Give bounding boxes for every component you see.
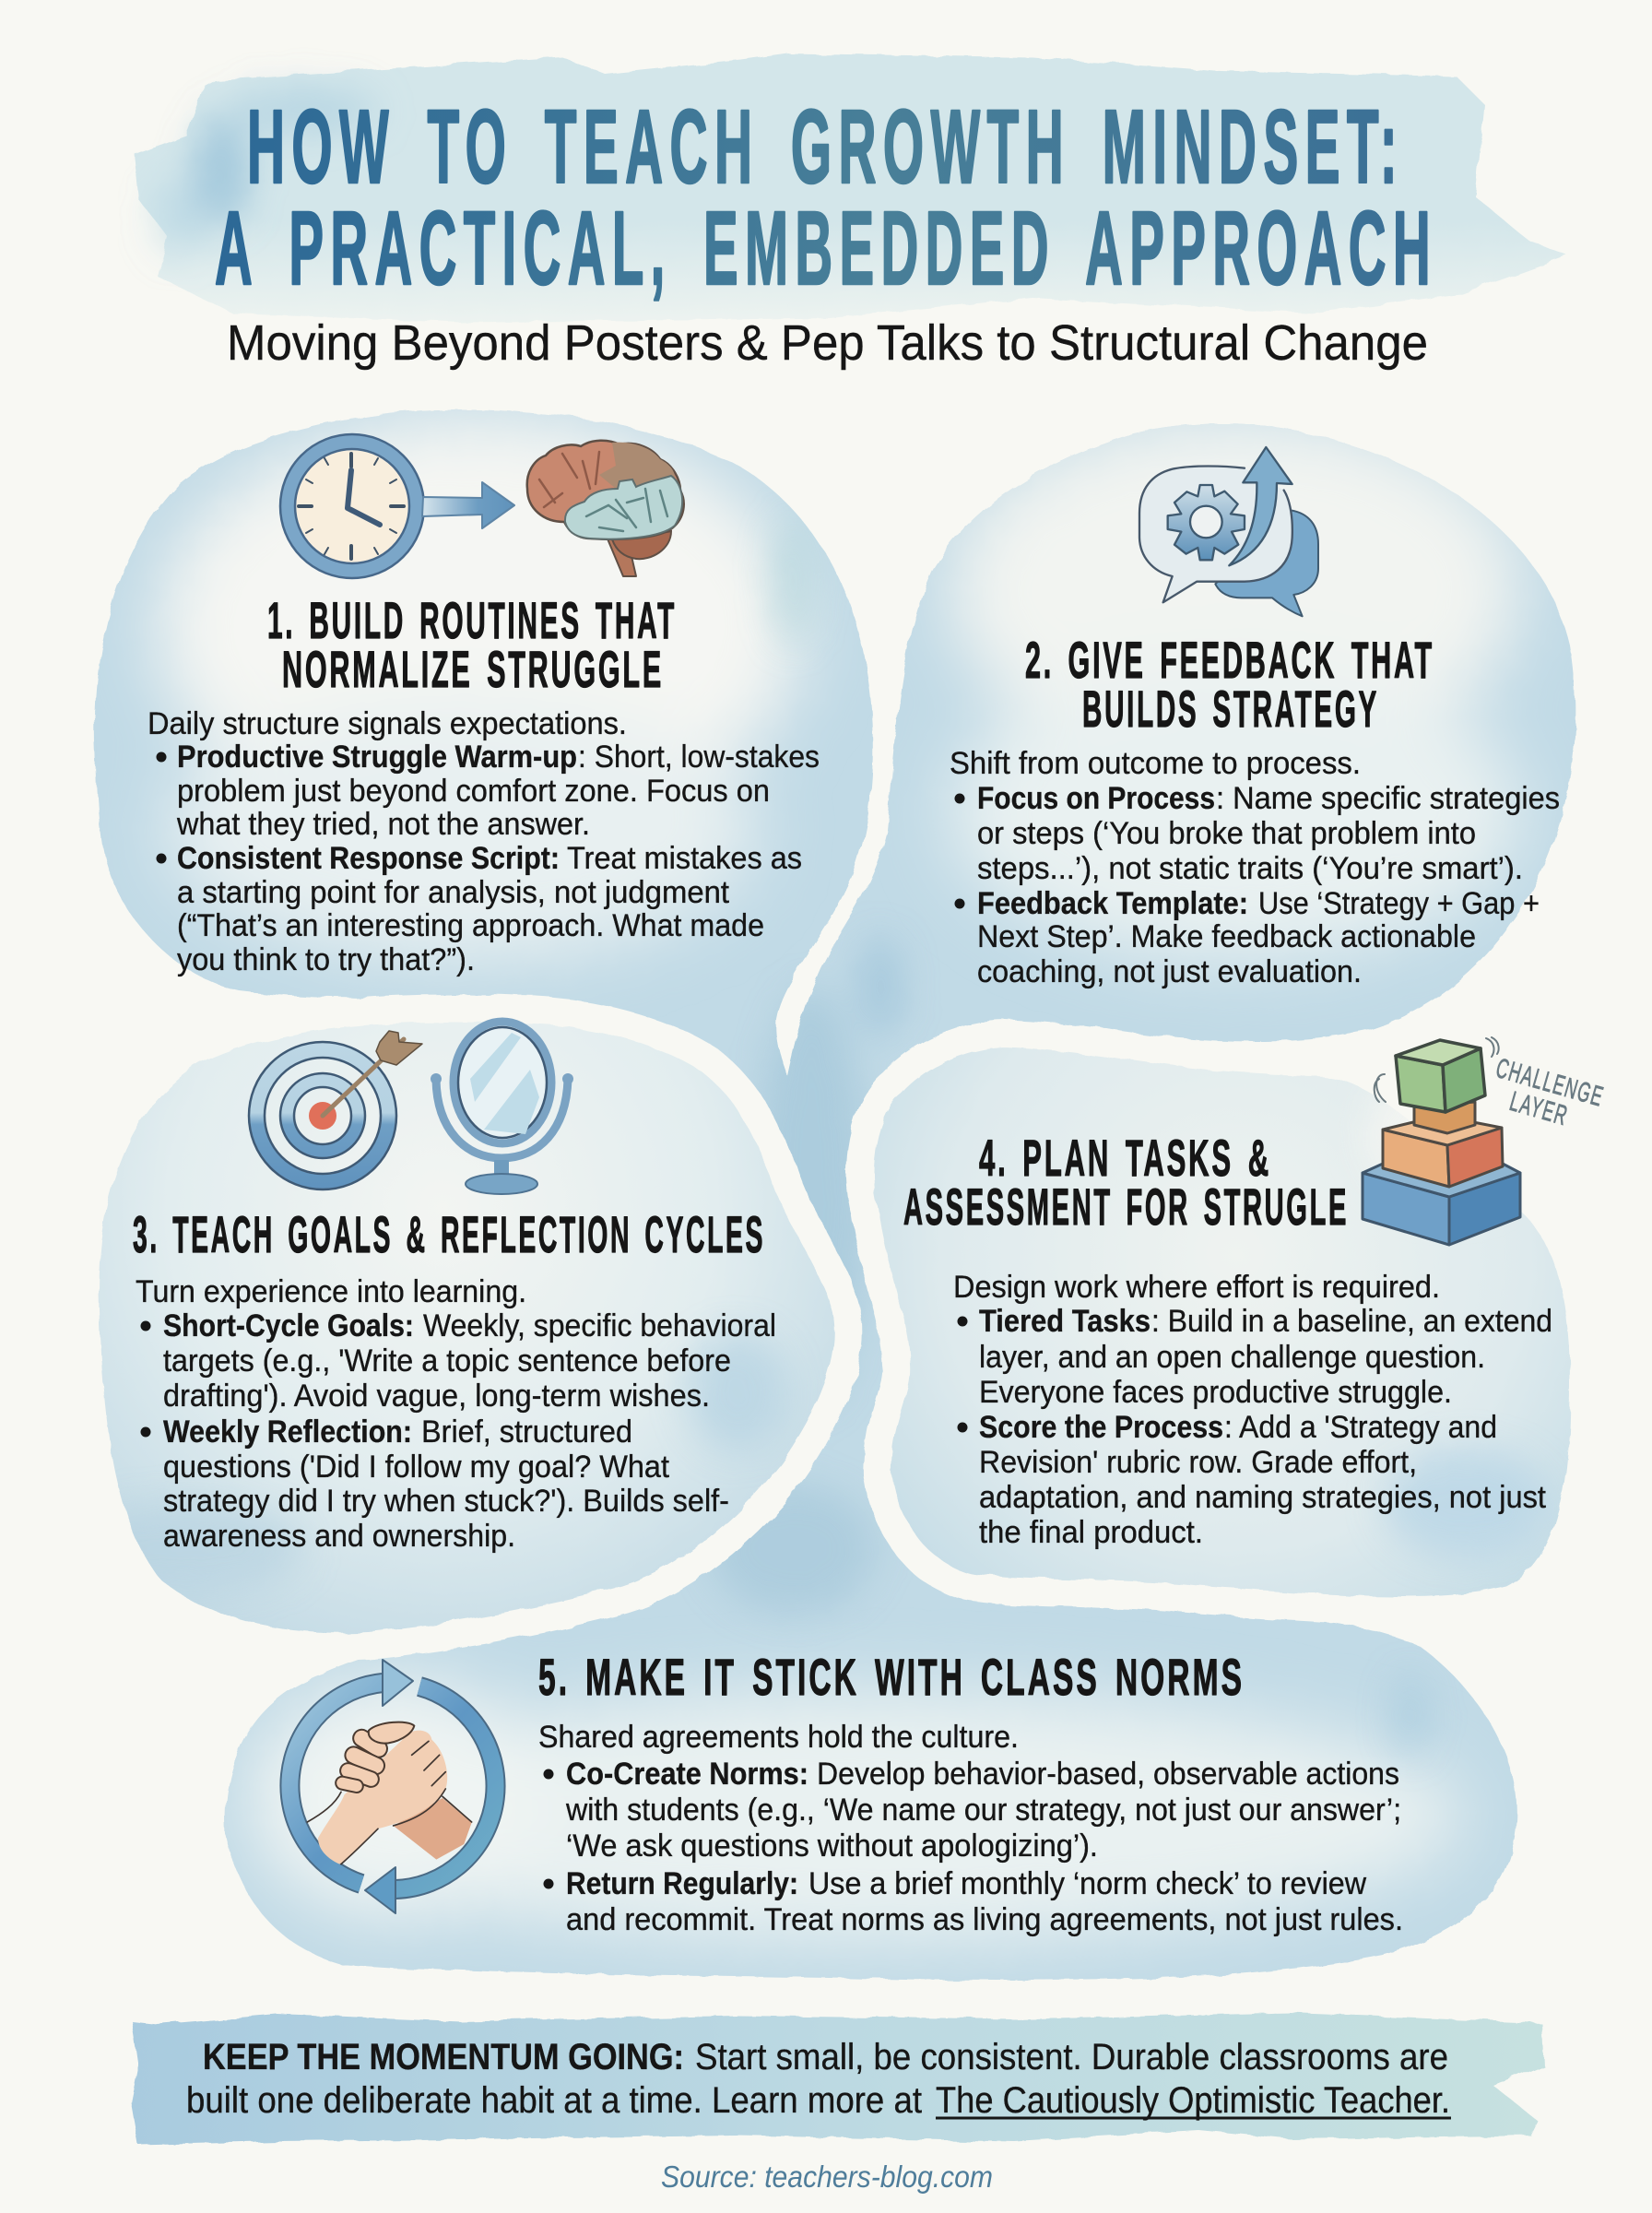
icon: brain puzzle — [527, 441, 684, 576]
body text 1: what they tried, not the answer. — [176, 807, 590, 842]
body text 3: strategy did I try when stuck?'). Builds self- — [163, 1484, 729, 1519]
body text 1: Productive Struggle Warm-up — [177, 740, 577, 775]
body text 2: : Name specific strategies — [1216, 781, 1560, 816]
subtitle: Moving Beyond Posters & Pep Talks to Structural Change — [227, 315, 1428, 371]
watercolor tree wash background — [74, 396, 1604, 2001]
body text 3: awareness and ownership. — [163, 1519, 515, 1554]
icon: clock — [280, 434, 424, 578]
body text 2 — [950, 746, 1560, 989]
body text 5 — [538, 1720, 1403, 1937]
label: challenge layer — [1493, 1053, 1608, 1131]
body text 1: you think to try that?”). — [177, 942, 475, 977]
body text 4: the final product. — [979, 1515, 1203, 1550]
footer text: KEEP THE MOMENTUM GOING: — [203, 2037, 684, 2077]
body text 3 — [136, 1274, 776, 1554]
title wash — [135, 53, 1567, 323]
icon: handshake with cycle arrows — [289, 1660, 496, 1913]
body text 4: : Build in a baseline, an extend — [1151, 1304, 1552, 1339]
icon: target and arrow — [249, 1031, 422, 1189]
body text 2: Use ‘Strategy + Gap + — [1258, 886, 1540, 921]
footer wash — [131, 2013, 1543, 2145]
body text 1: Consistent Response Script: — [177, 841, 560, 876]
body text 4: Tiered Tasks — [979, 1304, 1150, 1339]
body text 5: Shared agreements hold the culture. — [538, 1720, 1019, 1755]
footer text: The Cautiously Optimistic Teacher. — [936, 2080, 1450, 2121]
footer banner — [131, 2013, 1543, 2145]
body text 2: Feedback Template: — [977, 886, 1248, 921]
body text 1: problem just beyond comfort zone. Focus on — [177, 774, 770, 809]
body text 4: Design work where effort is required. — [953, 1270, 1440, 1305]
icon: speech bubbles gear arrow — [1139, 447, 1318, 616]
heading 2: BUILDS STRATEGY — [1082, 680, 1379, 738]
body text 1: : Short, low-stakes — [578, 740, 820, 775]
body text 3: drafting'). Avoid vague, long-term wishes. — [163, 1379, 710, 1414]
body text 4 — [953, 1270, 1552, 1550]
title text — [215, 89, 1437, 306]
heading 2 — [1025, 631, 1434, 738]
icon: mirror — [431, 1022, 573, 1194]
footer text: built one deliberate habit at a time. Learn more at — [186, 2080, 922, 2121]
body text 1: Daily structure signals expectations. — [148, 706, 627, 741]
body text 3: Short-Cycle Goals: — [163, 1308, 414, 1343]
body text 3: Brief, structured — [421, 1414, 632, 1450]
body text 2: or steps (‘You broke that problem into — [977, 816, 1476, 851]
body text 3: targets (e.g., 'Write a topic sentence before — [163, 1343, 731, 1379]
footer text — [186, 2037, 1451, 2121]
body text 5: and recommit. Treat norms as living agreements, not just rules. — [566, 1902, 1403, 1937]
body text 2: Shift from outcome to process. — [950, 746, 1361, 781]
panel 5: class norms — [226, 1609, 1521, 1978]
panel 3 wash — [65, 1008, 848, 1647]
panel 3: goals and reflection — [92, 1019, 844, 1641]
label: challenge layer: LAYER — [1506, 1086, 1572, 1131]
panel 4: tasks and assessment — [871, 1033, 1608, 1604]
body text 2: Focus on Process — [977, 781, 1215, 816]
icon: stacked blocks — [1363, 1037, 1520, 1245]
body text 5: Co-Create Norms: — [566, 1757, 808, 1792]
heading 4: 4. PLAN TASKS & — [979, 1129, 1271, 1187]
footer text: Start small, be consistent. Durable classrooms are — [695, 2037, 1448, 2077]
body text 4: Score the Process — [979, 1410, 1223, 1445]
body text 5: with students (e.g., ‘We name our strategy, not just our answer’; — [565, 1793, 1401, 1828]
body text 2: steps...’), not static traits (‘You’re smart’). — [977, 851, 1523, 886]
body text 4: Revision' rubric row. Grade effort, — [979, 1445, 1417, 1480]
body text 3: Weekly Reflection: — [163, 1414, 412, 1450]
body text 4: adaptation, and naming strategies, not just — [979, 1480, 1546, 1515]
body text 5: ‘We ask questions without apologizing’). — [566, 1828, 1098, 1864]
body text 5: Return Regularly: — [566, 1866, 798, 1901]
body text 1: a starting point for analysis, not judgment — [177, 875, 729, 910]
heading 1: NORMALIZE STRUGGLE — [282, 640, 664, 698]
body text 2: coaching, not just evaluation. — [977, 954, 1362, 989]
body text 4: Everyone faces productive struggle. — [979, 1375, 1452, 1410]
heading 3: 3. TEACH GOALS & REFLECTION CYCLES — [133, 1205, 765, 1263]
body text 1: Treat mistakes as — [567, 841, 802, 876]
body text 1: (“That’s an interesting approach. What made — [177, 908, 764, 943]
heading 1 — [267, 591, 677, 698]
heading 1: 1. BUILD ROUTINES THAT — [267, 591, 677, 649]
panel 2: feedback — [887, 420, 1574, 1037]
body text 3: Turn experience into learning. — [136, 1274, 526, 1309]
body text 3: questions ('Did I follow my goal? What — [163, 1450, 669, 1485]
body text 4: : Add a 'Strategy and — [1224, 1410, 1497, 1445]
title banner — [130, 53, 1567, 371]
body text 1 — [148, 706, 820, 977]
panel 4 wash — [859, 1034, 1584, 1611]
panel 1: build routines — [96, 410, 879, 1000]
body text 2: Next Step’. Make feedback actionable — [977, 919, 1476, 954]
body text 4: layer, and an open challenge question. — [979, 1340, 1485, 1375]
body text 3: Weekly, specific behavioral — [423, 1308, 776, 1343]
arrow: clock to brain — [422, 482, 514, 528]
source line: Source: teachers-blog.com — [661, 2160, 993, 2194]
body text 5: Develop behavior-based, observable actions — [817, 1757, 1399, 1792]
heading 4 — [903, 1129, 1349, 1236]
body text 5: Use a brief monthly ‘norm check’ to review — [808, 1866, 1366, 1901]
